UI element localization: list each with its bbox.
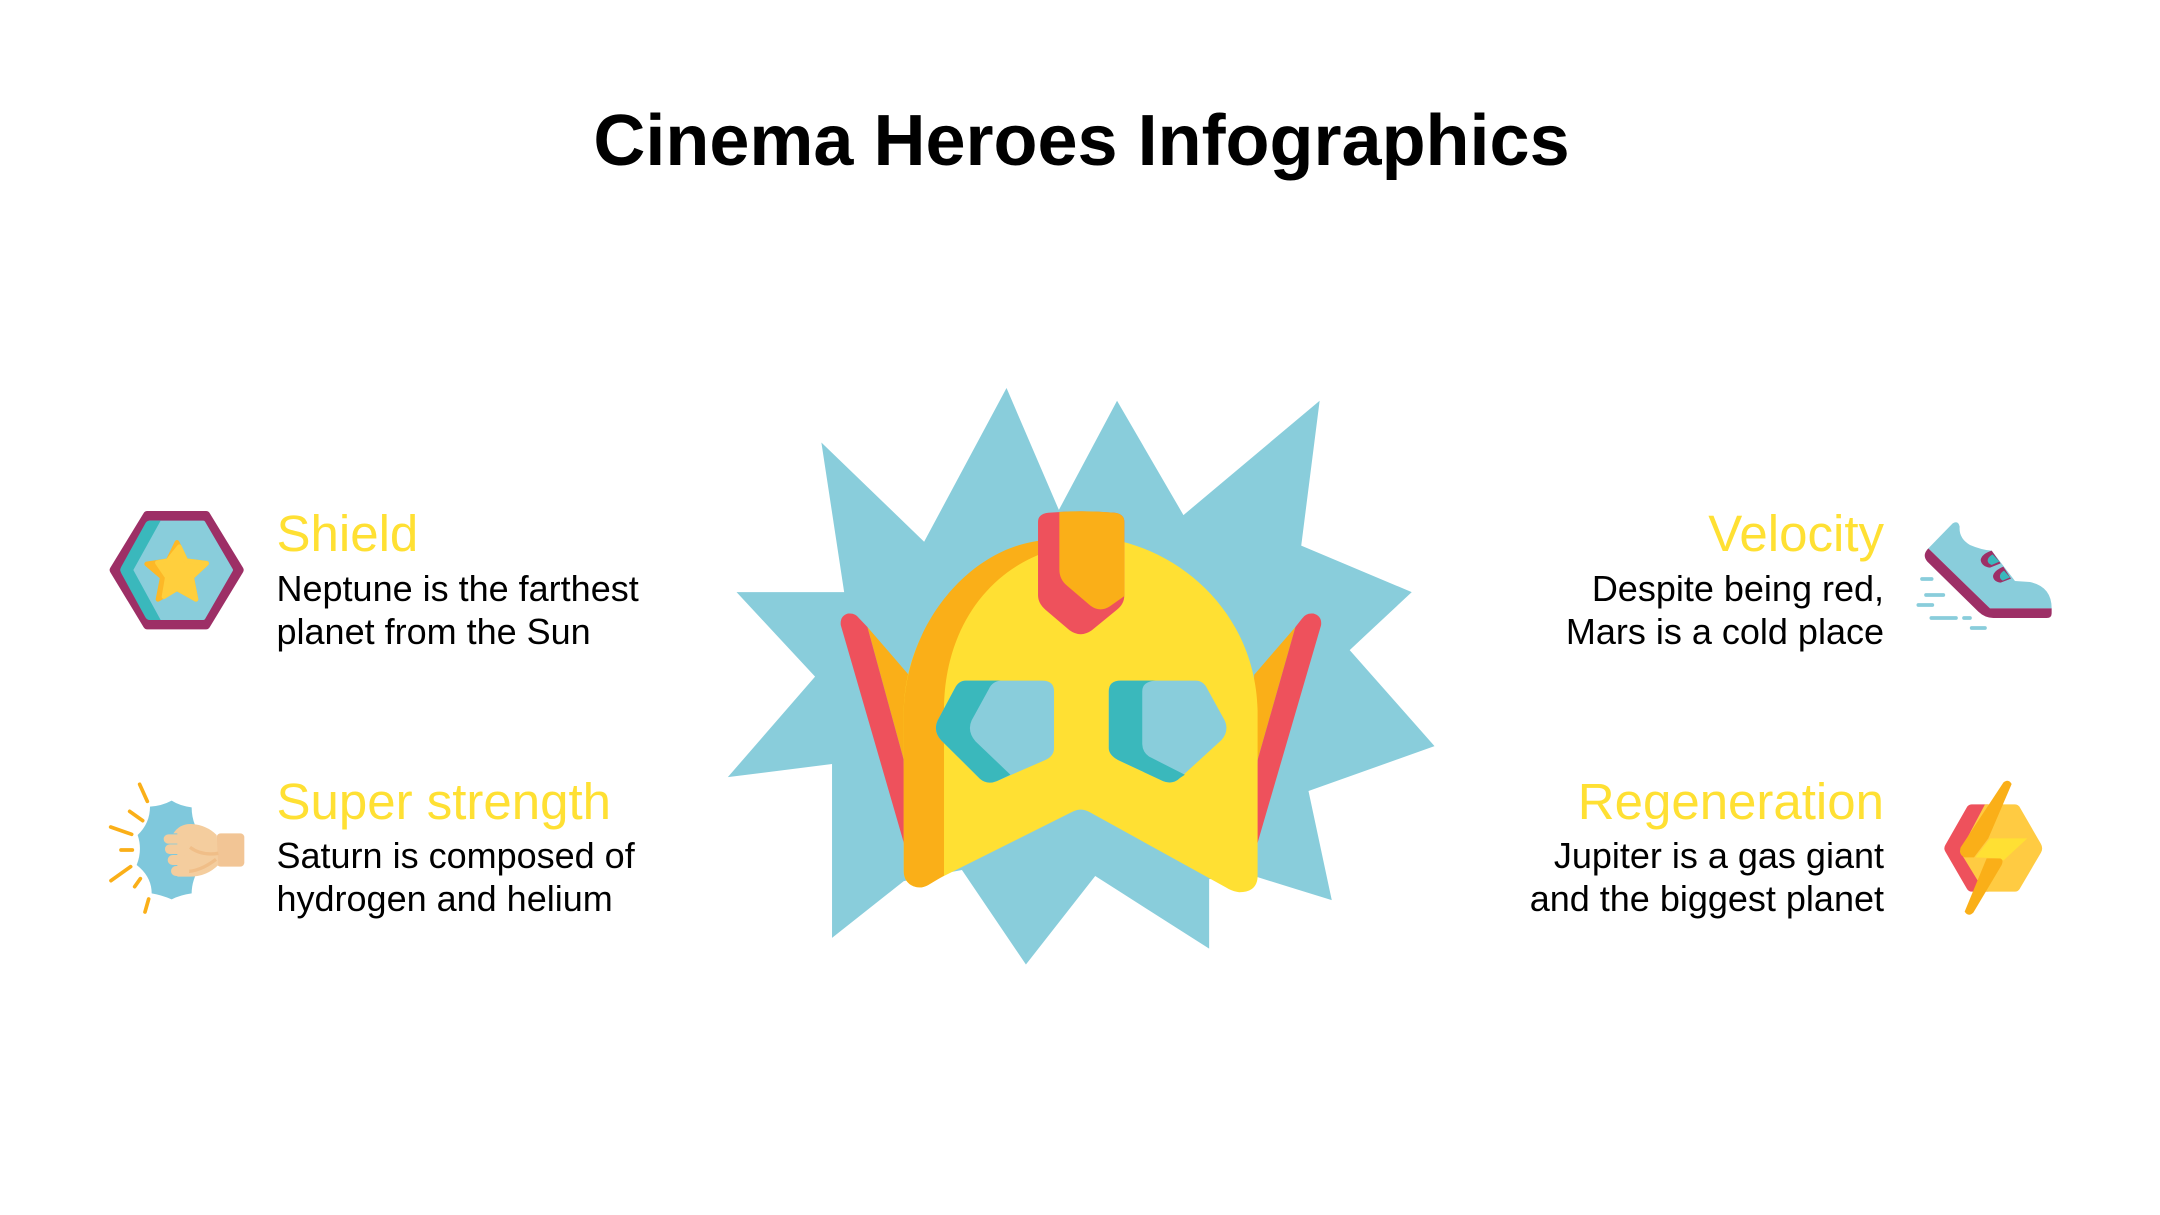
block: Regeneration [1530,772,1884,919]
block: Super strength [276,772,635,919]
text: Regeneration description [1530,835,1884,919]
hexagon inner shade [120,521,161,620]
text: Velocity description [1566,568,1884,652]
text: Regeneration description: Jupiter is a gas giant [1554,835,1884,876]
hexagon frame [114,515,239,625]
icon: lightning hexagon [1944,781,2042,915]
text: Shield description: Neptune is the farthest [276,568,639,608]
star shade [147,542,207,599]
title: Cinema Heroes Infographics [593,101,1570,181]
helmet shading [904,540,1049,887]
hexagon inner [122,523,231,618]
speed lines [1918,579,1985,628]
text: Shield description: planet from the Sun [276,611,591,652]
block: Velocity [1566,505,1884,652]
shoe upper [1928,522,2052,608]
impact burst [137,801,195,899]
hexagon front [1960,804,2042,892]
heading: Regeneration: Regeneration [1578,772,1884,830]
text: Velocity description: Despite being red, [1592,568,1884,608]
text: Shield description [276,568,639,652]
right eye [1109,681,1226,783]
text: Regeneration description: and the biggest planet [1530,878,1884,919]
hand [164,824,244,877]
text: Super strength description: hydrogen and helium [276,878,613,919]
starburst [728,388,1435,964]
text: Super strength description: Saturn is composed of [276,835,635,876]
star [157,547,207,599]
icon: shield [114,515,239,625]
text: Super strength description [276,835,635,919]
left eye [936,681,1054,783]
icon: fist [111,784,244,912]
hexagon back [1944,804,1988,892]
heading: Shield: Shield [276,505,418,562]
helmet body [904,536,1258,892]
shoe sole [1925,548,2052,618]
heading: Velocity: Velocity [1708,505,1884,562]
left ear [841,613,913,849]
bolt [1960,781,2027,915]
block: Shield [276,505,639,652]
icon: hero helmet on starburst [728,388,1435,964]
impact rays [111,784,149,912]
laces [1981,551,2011,583]
heading: Super strength: Super strength [276,772,611,830]
right ear [1250,613,1321,849]
text: Velocity description: Mars is a cold place [1566,611,1884,652]
icon: running shoe [1918,522,2052,628]
crest [1038,511,1124,634]
